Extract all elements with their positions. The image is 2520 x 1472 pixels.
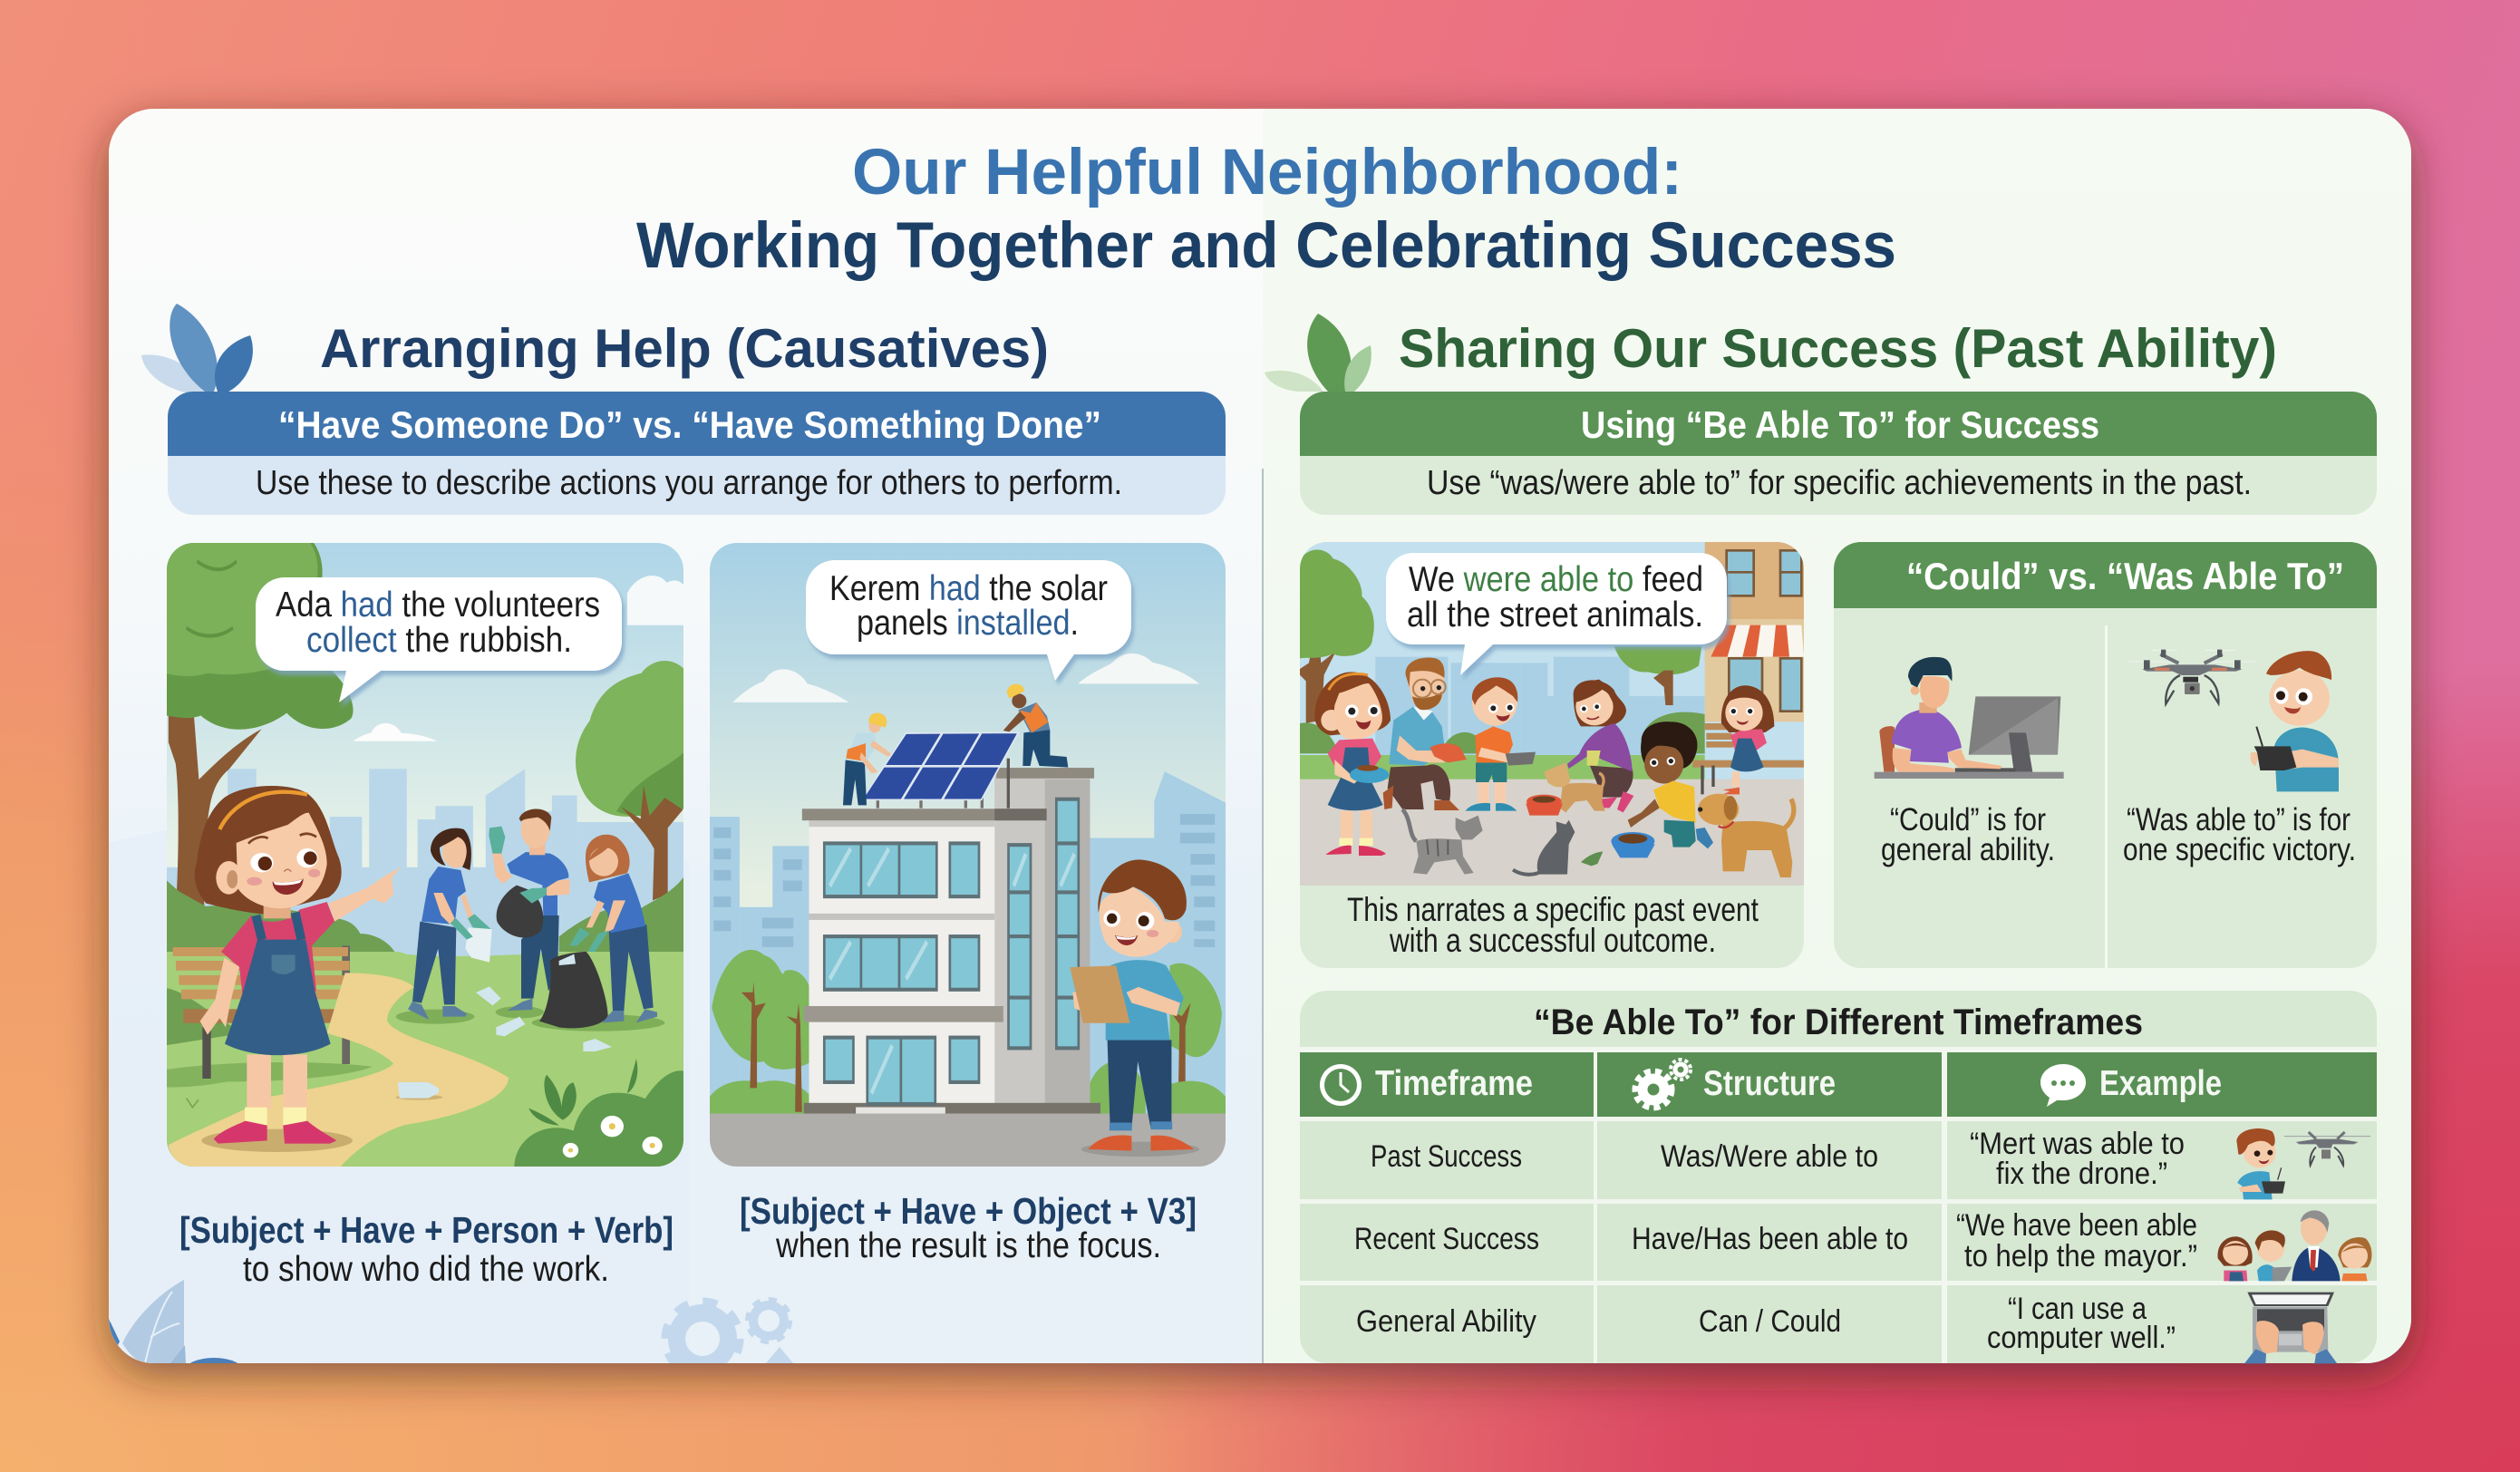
row: general ability: computer well.” [1987,1321,2176,1355]
volunteer three [586,835,657,1022]
park backdrop [165,540,688,1170]
shop building [1692,542,1805,794]
tree right foliage [576,661,688,817]
card: could vs was able to [1834,542,2377,968]
formula caption: who did the work: [Subject + Have + Person + Verb] [179,1209,674,1251]
rubbish bags and litter [476,927,612,1051]
banner: be able to: Use “was/were able to” for specific achievements in the past. [1427,464,2252,502]
main card [109,109,2411,1363]
row: general ability: General Ability [1356,1304,1536,1339]
section heading: Sharing Our Success (Past Ability) [1399,318,2277,379]
illustration: park clean-up [165,540,688,1170]
header: structure: Structure [1703,1064,1836,1103]
icon: laptop and hands [2244,1293,2337,1363]
volunteer two [489,809,569,1011]
caption: could: general ability. [1881,832,2055,867]
row: general ability: Can / Could [1699,1304,1841,1339]
title: Working Together and Celebrating Success [636,210,1896,282]
formula caption: result is the focus: when the result is the focus. [775,1226,1161,1265]
volunteers [396,786,684,1051]
table: timeframes [1300,991,2377,1363]
panel: sharing our success [1265,314,2377,1363]
caption: was able to: one specific victory. [2123,832,2356,867]
boy orange [1466,677,1536,811]
caption: specific past event [1347,891,1759,959]
title [636,137,1896,282]
caption: could [1881,802,2055,867]
building [802,768,1100,1114]
father [1383,657,1467,810]
caption: was able to: “Was able to” is for [2127,802,2350,838]
dog [1698,788,1794,877]
speech bubble: feed animals [1386,553,1727,675]
solar array [862,732,1018,799]
icon: boy and drone [2236,1128,2370,1199]
row: past success: fix the drone.” [1996,1157,2167,1191]
grey cat [1513,820,1575,875]
row: recent success: to help the mayor.” [1964,1239,2197,1273]
row: past success [1371,1127,2370,1199]
row: past success: Past Success [1371,1139,1522,1174]
row: recent success: Recent Success [1354,1222,1539,1256]
icon: boy with drone [2127,650,2339,791]
icon: blue leaves [141,304,253,393]
row: recent success: “We have been able [1956,1208,2197,1243]
worker right [1003,684,1068,768]
header: example: Example [2099,1064,2222,1103]
solar panels, workers, boy head [843,684,1187,957]
girl Ada [195,786,401,1152]
caption: was able to [2123,802,2356,867]
header: structure [1635,1060,1836,1108]
banner: be able to [1300,392,2377,515]
row: general ability: “I can use a [2008,1292,2147,1326]
path [169,973,509,1167]
speech bubble: feed animals: all the street animals. [1407,596,1703,634]
table heading: “Be Able To” for Different Timeframes [1534,1002,2143,1042]
speech bubble: Ada: collect the rubbish. [306,621,572,660]
orange cat [1544,762,1605,812]
boy head [1098,859,1187,957]
header: example [2040,1064,2222,1107]
girl with bowl [1314,672,1391,856]
row: past success: Was/Were able to [1661,1139,1878,1174]
formula caption: result is the focus: [Subject + Have + Object + V3] [740,1190,1197,1232]
icon: person at computer [1875,657,2064,779]
bench [1692,723,1805,768]
bench [172,945,350,1079]
right tree trunk and bush [559,786,684,952]
caption: specific past event: with a successful outcome. [1389,922,1716,959]
row: past success: “Mert was able to [1970,1127,2185,1161]
speech bubble: feed animals: We were able to feed [1409,560,1703,599]
card halves [109,109,2411,1363]
section heading: Arranging Help (Causatives) [320,318,1049,379]
trees [1300,550,1701,723]
banner: have someone do: Use these to describe actions you arrange for others to perform. [256,464,1122,502]
illustration: feeding animals [1300,542,1805,888]
row: recent success [1354,1208,2371,1281]
small girl [1721,685,1774,794]
caption: specific past event: This narrates a specific past event [1347,891,1759,928]
kid in yellow [1628,721,1713,848]
illustration: solar panels [708,540,1229,1170]
trees [708,950,1227,1118]
formula caption: who did the work [179,1209,674,1289]
flowers and bush [514,1059,688,1170]
row: general ability [1356,1292,2337,1363]
speech bubble: Ada: Ada had the volunteers [276,586,600,625]
card: feeding street animals [1300,542,1805,968]
icon: green leaves [1265,314,1371,392]
banner: have someone do: “Have Someone Do” vs. “Have Something Done” [278,403,1101,446]
mother [1567,680,1633,812]
speech bubble: Kerem: panels installed. [857,604,1079,643]
worker left [843,712,891,805]
banner: have someone do [168,392,1226,515]
header: timeframe: Timeframe [1375,1064,1533,1103]
tree left [165,540,354,913]
banner: be able to: Using “Be Able To” for Success [1581,403,2099,446]
panel: arranging help [109,304,1229,1383]
header: timeframe [1320,1064,1533,1106]
speech bubble: Ada [256,577,622,702]
title: Our Helpful Neighborhood: [852,137,1682,208]
bird [1581,852,1603,866]
bowls [1526,795,1655,857]
boy [2274,727,2339,791]
formula caption: result is the focus [740,1190,1197,1265]
formula caption: who did the work: to show who did the work. [243,1250,609,1289]
row: recent success: Have/Has been able to [1632,1222,1908,1256]
tabby cat [1402,809,1483,875]
caption: could: “Could” is for [1890,802,2046,838]
volunteer one [408,828,492,1020]
card: could vs was able to: “Could” vs. “Was Able To” [1906,555,2344,597]
decorative leaf and gears [109,1280,793,1383]
icon: children and mayor [2218,1210,2371,1281]
speech bubble: Kerem: Kerem had the solar [829,569,1108,608]
boy body [1070,960,1199,1157]
speech bubble: Kerem [806,560,1131,681]
bushes, bench and path [165,879,509,1169]
